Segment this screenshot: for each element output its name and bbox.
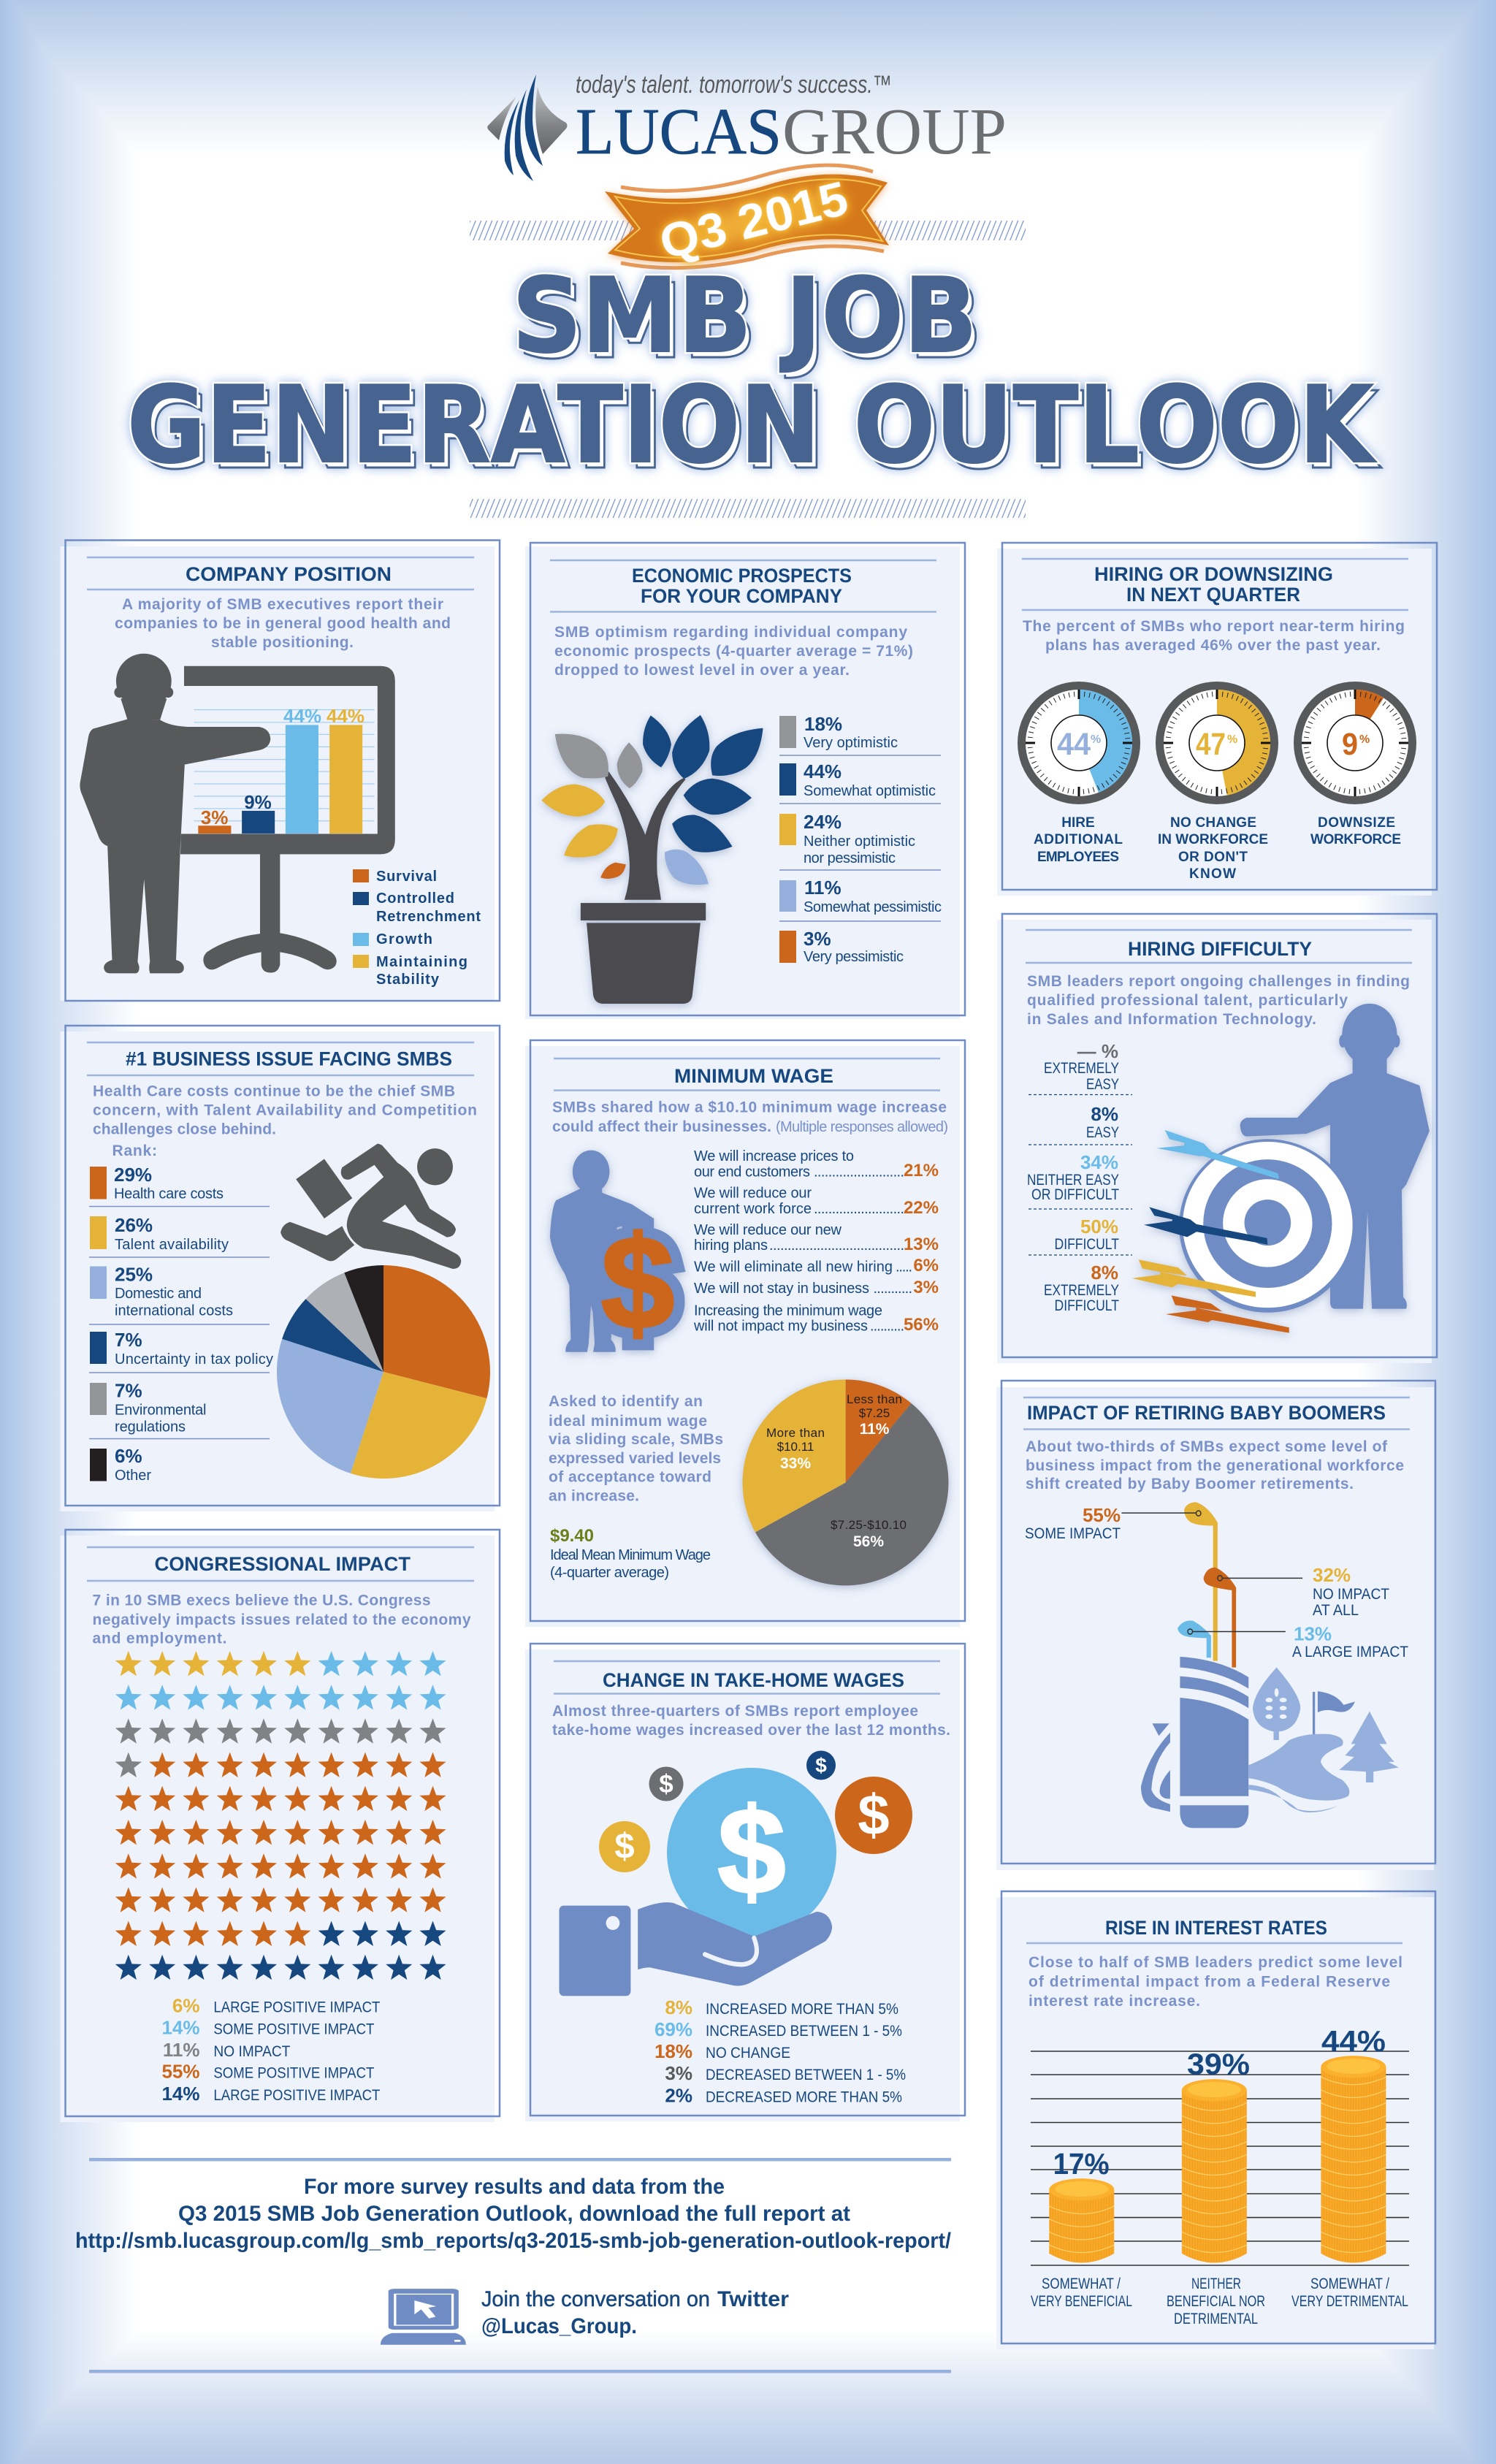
icon: hand holding coins: $ bbox=[815, 1754, 827, 1777]
intro text bbox=[1026, 1438, 1404, 1492]
intro text: concern, with Talent Availability and Competition bbox=[93, 1102, 477, 1119]
text: ideal minimum wage: ideal minimum wage bbox=[549, 1413, 707, 1430]
impact list: Increasing the minimum wage bbox=[694, 1303, 882, 1319]
legend: congressional impact bbox=[161, 1994, 381, 2105]
legend: congressional impact: SOME POSITIVE IMPACT bbox=[213, 2021, 375, 2038]
chart category labels: SOMEWHAT / bbox=[1042, 2276, 1121, 2292]
difficulty list: DIFFICULT bbox=[1055, 1236, 1119, 1253]
impact list: will not impact my business bbox=[693, 1319, 868, 1335]
footer text: twitter: @Lucas_Group. bbox=[481, 2314, 637, 2338]
impact list: ......................... bbox=[814, 1201, 904, 1217]
rank legend: 6% bbox=[115, 1445, 142, 1467]
logo: Lucas Group bbox=[487, 71, 1007, 181]
impact list: hiring plans bbox=[694, 1237, 768, 1254]
callout: 32% no impact at all: AT ALL bbox=[1313, 1602, 1359, 1619]
heading: congressional impact: CONGRESSIONAL IMPACT bbox=[155, 1553, 411, 1575]
legend: take-home wages: 2% bbox=[665, 2085, 692, 2107]
rank legend: 25% bbox=[115, 1263, 153, 1285]
difficulty list: OR DIFFICULT bbox=[1031, 1186, 1119, 1203]
logo: Lucas Group: GROUP bbox=[782, 96, 1007, 168]
intro text: dropped to lowest level in over a year. bbox=[554, 662, 850, 679]
heading: economic prospects: FOR YOUR COMPANY bbox=[641, 585, 842, 607]
impact list: our end customers bbox=[694, 1164, 810, 1180]
text: ideal minimum wage: $9.40 bbox=[550, 1526, 594, 1546]
intro text: could affect their businesses. bbox=[552, 1118, 771, 1135]
legend: take-home wages bbox=[654, 1996, 906, 2107]
impact list: We will increase prices to bbox=[694, 1148, 854, 1164]
icon: person with dollar sign: $ bbox=[601, 1210, 674, 1357]
legend: optimism levels: Somewhat pessimistic bbox=[804, 899, 942, 915]
legend: congressional impact: 11% bbox=[163, 2039, 200, 2061]
intro text: business impact from the generational workforce bbox=[1026, 1457, 1404, 1474]
gauge labels: NO CHANGE bbox=[1170, 815, 1256, 831]
intro text bbox=[115, 596, 451, 651]
ribbon: Q3 2015 bbox=[605, 165, 889, 270]
impact list: We will reduce our bbox=[694, 1186, 812, 1202]
panel: congressional impact bbox=[60, 1530, 500, 2122]
intro text: Close to half of SMB leaders predict some level bbox=[1028, 1954, 1402, 1971]
rank legend bbox=[89, 1143, 273, 1484]
impact list: ..................................... bbox=[769, 1237, 904, 1254]
intro text: take-home wages increased over the last 12 months. bbox=[552, 1722, 950, 1739]
impact list: 56% bbox=[904, 1315, 939, 1335]
chart category labels: SOMEWHAT / bbox=[1310, 2276, 1389, 2292]
gauge labels bbox=[1034, 815, 1401, 882]
coin stack chart: 39% bbox=[1187, 2047, 1250, 2080]
pie chart: ideal minimum wage: More than bbox=[766, 1426, 825, 1440]
difficulty list: 8% bbox=[1091, 1262, 1118, 1284]
intro text bbox=[552, 1099, 948, 1135]
difficulty list: DIFFICULT bbox=[1055, 1297, 1119, 1314]
legend: congressional impact: NO IMPACT bbox=[213, 2043, 291, 2060]
icon: person with dollar sign: $ bbox=[601, 1210, 674, 1357]
intro text: interest rate increase. bbox=[1028, 1993, 1200, 2010]
bar chart with presenter bbox=[80, 654, 395, 973]
gauge labels: IN WORKFORCE bbox=[1158, 832, 1268, 847]
impact list bbox=[693, 1148, 939, 1335]
difficulty list: — % bbox=[1077, 1040, 1118, 1062]
difficulty list bbox=[1027, 1040, 1132, 1314]
intro text: negatively impacts issues related to the economy bbox=[92, 1611, 471, 1628]
gauge: hire additional employees 44%: % bbox=[1091, 733, 1101, 746]
intro text: shift created by Baby Boomer retirements. bbox=[1026, 1476, 1354, 1492]
logo: Lucas Group: today's talent. tomorrow's success.™ bbox=[576, 71, 892, 99]
legend: take-home wages: DECREASED MORE THAN 5% bbox=[706, 2089, 902, 2105]
footer text: download the full report: For more survey results and data from the bbox=[304, 2175, 725, 2199]
icon: hand holding coins: $ bbox=[717, 1782, 786, 1920]
legend: congressional impact: LARGE POSITIVE IMPACT bbox=[213, 1999, 381, 2016]
title: SMB JOB: SMB JOB bbox=[512, 256, 977, 376]
panel: take-home wages bbox=[525, 1644, 965, 2121]
rank legend: Rank: bbox=[112, 1143, 157, 1159]
impact list: ..... bbox=[896, 1259, 912, 1275]
legend: company position: Stability bbox=[376, 972, 440, 988]
callout: 13% a large impact: 13% bbox=[1294, 1623, 1332, 1645]
icon: running businessperson with briefcase bbox=[280, 1144, 461, 1269]
legend: take-home wages: NO CHANGE bbox=[706, 2045, 790, 2061]
gauge labels: OR DON'T bbox=[1178, 850, 1248, 865]
heading: minimum wage: MINIMUM WAGE bbox=[674, 1065, 833, 1087]
top hatched rule bbox=[470, 221, 1026, 240]
panel: rise in interest rates bbox=[996, 1891, 1435, 2349]
bar chart with presenter: 44% bbox=[283, 705, 321, 727]
difficulty list: NEITHER EASY bbox=[1027, 1172, 1119, 1189]
footer text: download the full report: Q3 2015 SMB Job Generation Outlook, download the full report at bbox=[178, 2202, 850, 2226]
gauge labels: EMPLOYEES bbox=[1037, 850, 1119, 865]
gauge labels: ADDITIONAL bbox=[1034, 832, 1123, 847]
coin stack chart: 17% bbox=[1053, 2147, 1110, 2181]
icon: plant with coloured leaves bbox=[541, 715, 763, 1004]
intro text: 7 in 10 SMB execs believe the U.S. Congress bbox=[92, 1593, 431, 1609]
intro text: A majority of SMB executives report their bbox=[122, 596, 443, 613]
legend: company position: Maintaining bbox=[376, 954, 468, 970]
intro text: challenges close behind. bbox=[93, 1121, 276, 1138]
intro text: stable positioning. bbox=[211, 634, 354, 651]
title: GENERATION OUTLOOK: GENERATION OUTLOOK bbox=[127, 364, 1376, 487]
gauge: downsize workforce 9%: % bbox=[1359, 733, 1370, 746]
title: SMB JOB: SMB JOB bbox=[517, 262, 982, 382]
callout: 32% no impact at all bbox=[1313, 1564, 1389, 1619]
text: ideal minimum wage: (4-quarter average) bbox=[550, 1565, 669, 1581]
legend: optimism levels: Very pessimistic bbox=[804, 949, 904, 965]
panel: minimum wage bbox=[525, 1040, 965, 1627]
intro text: in Sales and Information Technology. bbox=[1027, 1011, 1316, 1028]
legend: take-home wages: 18% bbox=[654, 2040, 692, 2062]
legend: optimism levels: nor pessimistic bbox=[804, 850, 896, 866]
rank legend: Health care costs bbox=[114, 1186, 224, 1202]
pie chart: ideal minimum wage: 33% bbox=[780, 1455, 811, 1472]
intro text bbox=[1023, 618, 1405, 654]
callout: 13% a large impact bbox=[1292, 1623, 1408, 1660]
difficulty list: EXTREMELY bbox=[1044, 1282, 1119, 1299]
difficulty list: EASY bbox=[1086, 1076, 1119, 1093]
rank legend: Uncertainty in tax policy bbox=[115, 1351, 273, 1368]
heading: retiring baby boomers: IMPACT OF RETIRING BABY BOOMERS bbox=[1027, 1402, 1386, 1424]
intro text: About two-thirds of SMBs expect some level of bbox=[1026, 1438, 1388, 1455]
legend: take-home wages: 8% bbox=[665, 1996, 692, 2018]
pie chart: ideal minimum wage: $10.11 bbox=[777, 1440, 814, 1454]
heading: economic prospects: ECONOMIC PROSPECTS bbox=[632, 565, 852, 587]
footer bbox=[75, 2158, 952, 2373]
panel: retiring baby boomers bbox=[996, 1381, 1435, 1870]
impact list: 6% bbox=[913, 1256, 939, 1275]
impact list: We will reduce our new bbox=[694, 1222, 842, 1238]
legend: congressional impact: 14% bbox=[161, 2016, 200, 2038]
icon: person with target and arrows bbox=[1132, 1004, 1430, 1333]
intro text: Health Care costs continue to be the chief SMB bbox=[93, 1083, 455, 1100]
gauge: no change 47%: % bbox=[1227, 733, 1237, 746]
text: ideal minimum wage: via sliding scale, SMBs bbox=[549, 1431, 723, 1448]
icon: hand holding coins bbox=[559, 1750, 912, 1996]
legend: congressional impact: LARGE POSITIVE IMPACT bbox=[213, 2087, 381, 2104]
bar chart with presenter: 44% bbox=[327, 705, 365, 727]
legend: optimism levels: Very optimistic bbox=[804, 735, 898, 751]
intro text: of detrimental impact from a Federal Reserve bbox=[1028, 1974, 1390, 1990]
difficulty list: 50% bbox=[1080, 1216, 1118, 1237]
rank legend: 7% bbox=[115, 1380, 142, 1402]
bar chart with presenter: 9% bbox=[244, 791, 272, 813]
legend: take-home wages: INCREASED BETWEEN 1 - 5% bbox=[706, 2023, 902, 2040]
chart category labels: BENEFICIAL NOR bbox=[1167, 2293, 1265, 2310]
legend: company position: Survival bbox=[376, 869, 437, 885]
icon: person with dollar sign bbox=[550, 1151, 674, 1357]
legend: optimism levels: 3% bbox=[804, 928, 831, 950]
heading: economic prospects bbox=[632, 565, 852, 607]
title: GENERATION OUTLOOK: GENERATION OUTLOOK bbox=[132, 370, 1381, 493]
intro text bbox=[1028, 1954, 1402, 2010]
chart category labels: DETRIMENTAL bbox=[1174, 2311, 1258, 2327]
intro text bbox=[552, 1703, 950, 1739]
legend: take-home wages: DECREASED BETWEEN 1 - 5% bbox=[706, 2067, 906, 2083]
text: ideal minimum wage: Asked to identify an bbox=[549, 1393, 703, 1410]
callout: 32% no impact at all: 32% bbox=[1313, 1564, 1351, 1586]
intro text: and employment. bbox=[92, 1630, 226, 1647]
legend: congressional impact: 6% bbox=[172, 1994, 200, 2016]
title: SMB JOB: SMB JOB bbox=[512, 256, 977, 376]
rank legend: Environmental bbox=[115, 1403, 206, 1419]
footer text: twitter: Twitter bbox=[717, 2287, 789, 2311]
pie chart: ideal minimum wage: 56% bbox=[853, 1533, 884, 1550]
chart category labels bbox=[1031, 2276, 1408, 2327]
gauge: hire additional employees 44% bbox=[1021, 685, 1137, 801]
logo: Lucas Group: LUCAS bbox=[576, 96, 782, 168]
icon: golf bag, clubs and course bbox=[1121, 1502, 1399, 1828]
callout: 55% some impact: 55% bbox=[1083, 1504, 1121, 1526]
legend: optimism levels: 11% bbox=[804, 877, 842, 899]
impact list: 3% bbox=[913, 1278, 939, 1297]
text: ideal minimum wage: expressed varied levels bbox=[549, 1450, 721, 1467]
icon: hand holding coins: $ bbox=[659, 1770, 673, 1799]
chart category labels: VERY DETRIMENTAL bbox=[1291, 2293, 1408, 2310]
legend: optimism levels bbox=[779, 713, 942, 965]
footer text: download the full report bbox=[75, 2175, 952, 2253]
rank legend: international costs bbox=[115, 1303, 233, 1319]
intro text: SMBs shared how a $10.10 minimum wage increase bbox=[552, 1099, 947, 1116]
gauge labels: HIRE bbox=[1061, 815, 1095, 831]
bar chart with presenter: 3% bbox=[201, 806, 228, 828]
icon: hand holding coins: $ bbox=[614, 1827, 635, 1866]
impact list: 13% bbox=[904, 1235, 939, 1254]
gauge: hire additional employees 44%: 44 bbox=[1057, 727, 1091, 762]
text: ideal minimum wage: Ideal Mean Minimum Wage bbox=[550, 1547, 711, 1563]
legend: optimism levels: Somewhat optimistic bbox=[804, 783, 936, 799]
difficulty list: EXTREMELY bbox=[1044, 1060, 1119, 1077]
panel: company position bbox=[60, 541, 500, 1001]
text: ideal minimum wage: of acceptance toward bbox=[549, 1468, 711, 1486]
heading: business issue: #1 BUSINESS ISSUE FACING SMBS bbox=[126, 1048, 452, 1069]
legend: congressional impact: SOME POSITIVE IMPACT bbox=[213, 2064, 375, 2082]
impact list: current work force bbox=[694, 1201, 812, 1217]
coin stack chart: 44% bbox=[1321, 2024, 1386, 2058]
title: GENERATION OUTLOOK: GENERATION OUTLOOK bbox=[127, 364, 1376, 487]
heading: take-home wages: CHANGE IN TAKE-HOME WAGES bbox=[603, 1669, 904, 1691]
pie chart: ideal minimum wage: $7.25 bbox=[859, 1406, 890, 1420]
gauge labels: WORKFORCE bbox=[1310, 832, 1401, 847]
heading: hiring or downsizing: HIRING OR DOWNSIZING bbox=[1094, 563, 1333, 585]
rank legend: regulations bbox=[115, 1419, 186, 1435]
legend: congressional impact: 55% bbox=[161, 2060, 200, 2082]
callout: 13% a large impact: A LARGE IMPACT bbox=[1292, 1644, 1408, 1660]
rank legend: 26% bbox=[115, 1214, 153, 1236]
text: ideal minimum wage bbox=[549, 1393, 723, 1581]
intro text bbox=[92, 1593, 471, 1647]
intro text: qualified professional talent, particularly bbox=[1027, 992, 1348, 1009]
gauge: no change 47% bbox=[1160, 685, 1274, 801]
intro text: Almost three-quarters of SMBs report employee bbox=[552, 1703, 918, 1720]
footer text: twitter bbox=[481, 2287, 789, 2338]
impact list: .......... bbox=[870, 1319, 904, 1335]
legend: company position bbox=[353, 869, 481, 988]
legend: take-home wages: 3% bbox=[665, 2062, 692, 2084]
intro text bbox=[554, 624, 913, 679]
pie chart: ideal minimum wage: $7.25-$10.10 bbox=[831, 1518, 907, 1532]
pie chart: ideal minimum wage: Less than bbox=[847, 1392, 902, 1406]
impact list: ......................... bbox=[814, 1164, 904, 1180]
intro text: SMB optimism regarding individual company bbox=[554, 624, 907, 641]
heading: company position: COMPANY POSITION bbox=[186, 563, 392, 585]
legend: optimism levels: 24% bbox=[804, 811, 842, 833]
impact list: ........... bbox=[874, 1281, 912, 1297]
intro text bbox=[93, 1083, 477, 1138]
gauge labels: DOWNSIZE bbox=[1318, 815, 1395, 831]
heading: hiring or downsizing: IN NEXT QUARTER bbox=[1126, 584, 1300, 606]
difficulty list: 34% bbox=[1080, 1151, 1118, 1173]
text: ideal minimum wage: an increase. bbox=[549, 1487, 639, 1504]
intro text: SMB leaders report ongoing challenges in finding bbox=[1027, 973, 1410, 990]
chart category labels: VERY BENEFICIAL bbox=[1031, 2293, 1132, 2310]
panel: #1 business issue bbox=[60, 1026, 500, 1511]
star chart: 100 stars bbox=[115, 1651, 446, 1980]
intro text bbox=[1027, 973, 1410, 1028]
footer text: download the full report: http://smb.lucasgroup.com/lg_smb_reports/q3-2015-smb-job-generation-outlook-report/ bbox=[75, 2229, 952, 2253]
intro text: companies to be in general good health and bbox=[115, 615, 451, 632]
gauge labels: KNOW bbox=[1189, 866, 1236, 882]
callout: 55% some impact bbox=[1025, 1504, 1121, 1542]
heading: hiring or downsizing bbox=[1094, 563, 1333, 606]
heading: hiring difficulty: HIRING DIFFICULTY bbox=[1128, 938, 1312, 960]
difficulty list: 8% bbox=[1091, 1103, 1118, 1125]
legend: optimism levels: 44% bbox=[804, 760, 842, 782]
impact list: 22% bbox=[904, 1198, 939, 1218]
intro text: plans has averaged 46% over the past year. bbox=[1045, 637, 1381, 654]
heading: rise in interest rates: RISE IN INTEREST RATES bbox=[1105, 1917, 1327, 1939]
chart category labels: NEITHER bbox=[1191, 2276, 1241, 2292]
legend: congressional impact: 14% bbox=[161, 2083, 200, 2105]
legend: company position: Controlled bbox=[376, 890, 454, 907]
panel: economic prospects bbox=[525, 543, 965, 1019]
intro text: The percent of SMBs who report near-term hiring bbox=[1023, 618, 1405, 635]
impact list: We will eliminate all new hiring bbox=[694, 1259, 893, 1275]
panel: hiring or downsizing bbox=[997, 543, 1437, 896]
difficulty list: EASY bbox=[1086, 1124, 1119, 1141]
ribbon: Q3 2015: Q3 2015 bbox=[654, 170, 853, 270]
rank legend: Talent availability bbox=[115, 1237, 229, 1253]
pie chart: ideal minimum wage: 11% bbox=[860, 1421, 890, 1438]
rank legend: Other bbox=[115, 1468, 151, 1484]
rank legend: 29% bbox=[114, 1164, 152, 1186]
callout: 32% no impact at all: NO IMPACT bbox=[1313, 1586, 1389, 1603]
footer text: twitter: Join the conversation on bbox=[481, 2287, 710, 2311]
panel: hiring difficulty bbox=[997, 914, 1437, 1363]
legend: optimism levels: 18% bbox=[804, 713, 842, 735]
gauge: downsize workforce 9%: 9 bbox=[1342, 727, 1358, 762]
coin stack chart bbox=[1031, 2024, 1409, 2265]
pie chart: business issues bbox=[277, 1265, 490, 1479]
legend: optimism levels: Neither optimistic bbox=[804, 834, 915, 850]
legend: take-home wages: 69% bbox=[654, 2018, 692, 2040]
gauge: no change 47%: 47 bbox=[1196, 727, 1226, 762]
legend: company position: Growth bbox=[376, 931, 432, 947]
rank legend: Domestic and bbox=[115, 1286, 202, 1302]
intro text: economic prospects (4-quarter average = 71%) bbox=[554, 643, 913, 660]
legend: company position: Retrenchment bbox=[376, 909, 481, 925]
impact list: 21% bbox=[904, 1161, 939, 1180]
pie chart: ideal minimum wage bbox=[743, 1379, 948, 1585]
impact list: We will not stay in business bbox=[694, 1281, 869, 1297]
rank legend: 7% bbox=[115, 1329, 142, 1351]
icon: hand holding coins: $ bbox=[858, 1782, 890, 1847]
legend: take-home wages: INCREASED MORE THAN 5% bbox=[706, 2001, 898, 2018]
gauge: downsize workforce 9% bbox=[1297, 685, 1413, 801]
intro text: (Multiple responses allowed) bbox=[776, 1119, 948, 1135]
icon: computer with cursor bbox=[381, 2289, 466, 2345]
callout: 55% some impact: SOME IMPACT bbox=[1025, 1525, 1121, 1542]
